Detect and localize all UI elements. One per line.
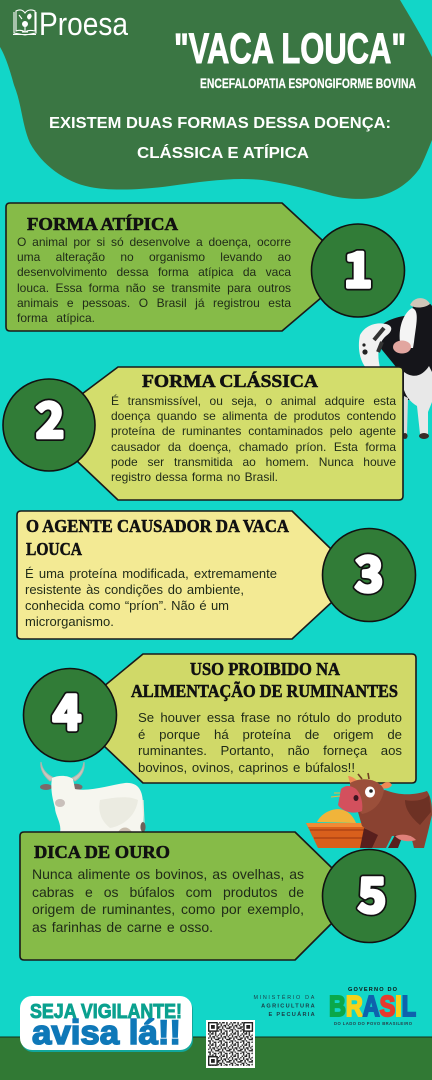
number badge 5: 5 [358,856,386,926]
number badge 3: 3 [355,536,383,606]
body text [111,394,401,490]
heading: LOUCA [26,539,82,559]
panel shape [6,203,322,331]
number badge 4 [24,668,116,762]
body text: É transmissível, ou seja, o animal adquire esta [111,394,396,408]
body text [25,566,295,636]
panel 1: forma atípica [6,203,404,331]
body text: registro dessa forma no Brasil. [111,470,278,484]
intro heading: EXISTEM DUAS FORMAS DESSA DOENÇA: [49,115,391,132]
cow muzzle [338,786,362,813]
body text: O animal por si só desenvolve a doença, ocorre [17,235,291,249]
number badge 3 [322,528,416,622]
panel shape [103,654,416,783]
government logo: GOVERNO DO [348,987,398,993]
ministry logo: E PECUÁRIA [268,1011,316,1018]
body text: bovinos, ovinos, caprinos e búfalos!! [138,760,355,775]
cow chest and legs [404,366,432,434]
body text: microrganismo. [25,614,114,629]
heading [131,659,398,701]
body text: É uma proteína modificada, extremamente [25,566,277,581]
panel shape [78,367,403,500]
cow head [350,779,384,814]
campaign badge: seja vigilante, avisa lá: avisa lá!! [32,1014,181,1052]
number badge 2: 2 [36,382,64,452]
cow body [358,790,432,848]
panel 4: uso proibido [24,654,416,783]
heading: FORMA CLÁSSICA [142,371,318,391]
body text [32,866,308,940]
panel 3: agente causador [17,511,416,639]
heading: ALIMENTAÇÃO DE RUMINANTES [131,681,398,701]
body text: Nunca alimente os bovinos, as ovelhas, as [32,866,304,882]
intro heading: CLÁSSICA E ATÍPICA [137,143,309,162]
body text: proteína de ruminantes contaminados pelo agente [111,424,396,438]
number badge 4: 4 [53,674,81,744]
ministry logo [253,994,316,1018]
body text: conhecida como “príon”. Não é um [25,598,229,613]
illustration: black and white cow [359,298,432,439]
government logo: BRASIL [329,991,416,1023]
body text: animais e pessoas. O Brasil já registrou esta [17,296,291,310]
body text: pode ser transmitida ao homem. Nunca houve [111,455,396,469]
heading: USO PROIBIDO NA [190,659,340,679]
intro heading [49,115,391,162]
number badge 1: 1 [344,231,372,301]
number badge 1: 1 [344,231,372,301]
footer band [0,1036,432,1080]
body text: é porque há proteína de origem de [138,727,402,742]
body text [17,235,295,331]
QR code [206,1020,255,1068]
panel 5: dica de ouro [20,832,416,960]
heading [26,516,289,559]
panel shape [17,511,332,639]
heading: O AGENTE CAUSADOR DA VACA [26,516,289,536]
ministry logo: AGRICULTURA [261,1004,316,1010]
body text: desenvolvimento dessa forma atípica da vaca [17,265,291,279]
campaign badge: seja vigilante, avisa lá: SEJA VIGILANTE! [30,1001,182,1023]
body text: resistente às condições do ambiente, [25,582,244,597]
heading: DICA DE OURO [34,842,170,862]
illustration: brown cow and trough [306,773,432,848]
logo wordmark: Proesa [39,6,128,42]
body text: ruminantes. Portanto, não forneça aos [138,743,402,758]
body text: causador da doença, chamado príon. Esta forma [111,440,396,454]
number badge 3: 3 [355,536,383,606]
body text: louca. Essa forma não se transmite para outros [17,281,291,295]
heading: FORMA ATÍPICA [27,214,178,234]
trough [306,823,365,848]
number badge 5: 5 [358,856,386,926]
body text: Se houver essa frase no rótulo do produto [138,710,402,725]
number badge 2 [3,379,95,471]
hay [317,809,356,823]
number badge 2: 2 [36,382,64,452]
number badge 4: 4 [53,674,81,744]
ministry logo: MINISTÉRIO DA [253,994,316,1001]
cow white blaze [400,308,417,348]
body text: origem de ruminantes, como por exemplo, [32,901,304,917]
campaign badge: seja vigilante, avisa lá [20,996,193,1052]
ears [348,776,392,789]
body text: doença quando se alimenta de produtos contendo [111,409,396,423]
panel 2: forma clássica [3,367,403,500]
panel shape [20,832,332,960]
body text: as farinhas de carne e osso. [32,919,213,935]
body text [138,710,408,782]
government logo: DO LADO DO POVO BRASILEIRO [334,1021,413,1026]
body text: forma atípica. [17,311,95,325]
icon: book and plant [13,10,36,35]
body text: uma alteração no organismo levando ao [17,250,291,264]
cow white flank [359,323,391,368]
number badge 1 [312,224,404,317]
logo: Proesa [13,6,128,42]
cow dark hide [378,300,432,400]
body text: cabras e os búfalos com produtos de [32,884,304,900]
number badge 5 [322,850,416,942]
illustration: white cow [40,762,146,832]
header blob [0,0,432,199]
